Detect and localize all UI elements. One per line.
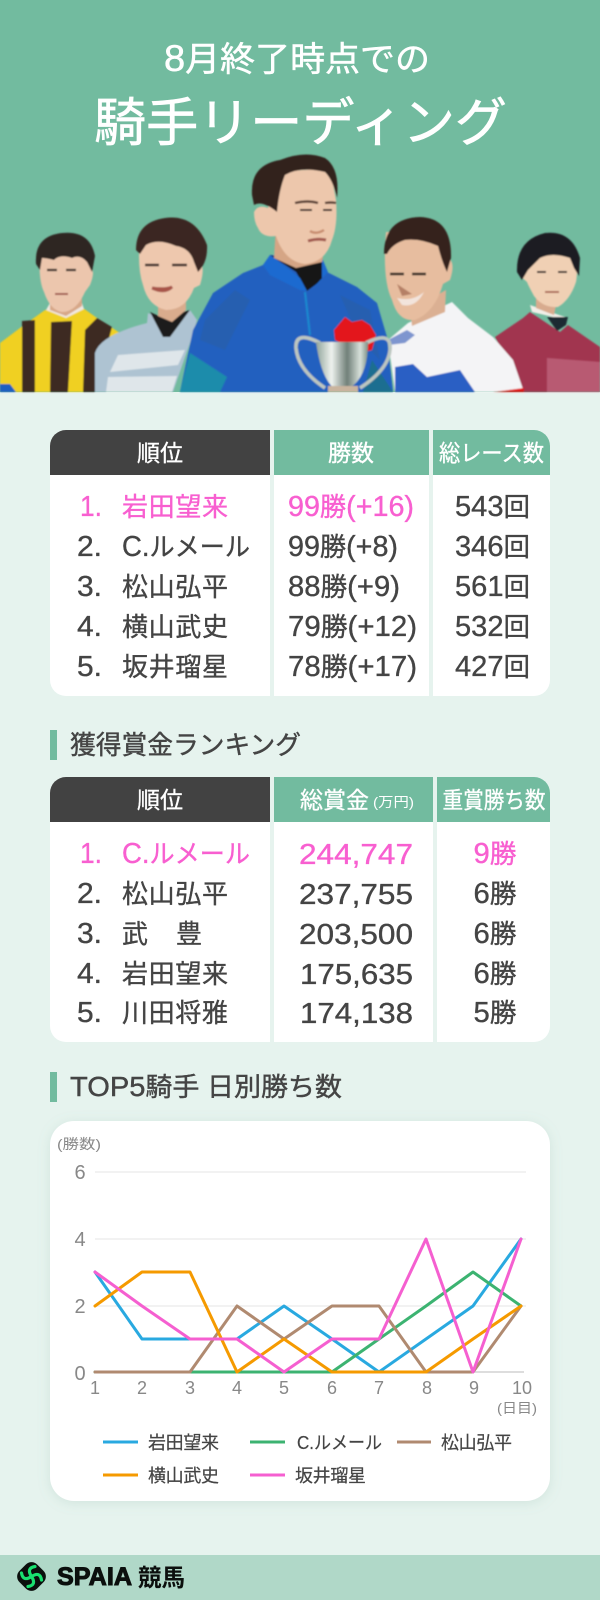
x axis labels: 5 bbox=[279, 1378, 289, 1398]
jockey photos bbox=[0, 154, 600, 392]
row 3: 武 bbox=[122, 919, 148, 949]
row 5: 坂井瑠星 bbox=[122, 652, 228, 682]
y axis title: (勝数) bbox=[57, 1136, 101, 1152]
row 2: 237,755 bbox=[299, 879, 413, 911]
x axis labels: 2 bbox=[137, 1378, 147, 1398]
table 1: jockey ranking bbox=[50, 430, 550, 696]
row 5 bbox=[77, 651, 530, 683]
row 4: 79勝(+12) bbox=[288, 611, 417, 643]
row 1: 岩田望来 bbox=[122, 492, 228, 522]
row 4 bbox=[77, 958, 516, 991]
x axis labels: 9 bbox=[469, 1378, 479, 1398]
row 4: 4. bbox=[77, 958, 102, 990]
legend: 松山弘平 bbox=[441, 1433, 512, 1453]
trophy and red rosette bbox=[296, 317, 390, 392]
header labels: 順位 bbox=[137, 787, 183, 813]
row 5 bbox=[77, 997, 516, 1030]
row 5: 5. bbox=[77, 997, 102, 1029]
row 5: 78勝(+17) bbox=[288, 651, 417, 683]
header labels: 重賞勝ち数 bbox=[442, 787, 546, 813]
row 1 bbox=[80, 838, 516, 871]
row 1: 9勝 bbox=[474, 838, 516, 870]
title line 1: 8月終了時点での bbox=[164, 38, 430, 79]
y axis labels and grid: 2 bbox=[74, 1296, 86, 1318]
x axis labels: 10 bbox=[512, 1378, 532, 1398]
header labels: 総賞金 bbox=[300, 787, 369, 813]
row 4: 6勝 bbox=[474, 958, 516, 990]
x axis labels: 1 bbox=[90, 1378, 100, 1398]
row 5: 5勝 bbox=[474, 997, 516, 1029]
row 2: 99勝(+8) bbox=[288, 531, 398, 563]
row 3 bbox=[77, 571, 530, 603]
row 4: 175,635 bbox=[300, 959, 413, 991]
row 1: 244,747 bbox=[299, 839, 413, 871]
row 1 bbox=[80, 491, 530, 523]
y axis labels and grid: 4 bbox=[74, 1229, 86, 1251]
row 4: 532回 bbox=[455, 611, 530, 643]
y axis labels and grid bbox=[74, 1162, 526, 1385]
row 3: 豊 bbox=[176, 919, 202, 949]
row 2: 6勝 bbox=[474, 878, 516, 910]
row 2 bbox=[77, 878, 516, 911]
x axis labels: 3 bbox=[185, 1378, 195, 1398]
icon: SPAIA logo bbox=[14, 1559, 49, 1594]
row 2 bbox=[77, 531, 530, 563]
row 3: 3. bbox=[77, 571, 102, 603]
row 5: 174,138 bbox=[300, 998, 413, 1030]
x axis labels: (日目) bbox=[497, 1400, 537, 1416]
x axis labels: 7 bbox=[374, 1378, 384, 1398]
heading: prize ranking: 獲得賞金ランキング bbox=[70, 730, 301, 760]
row 3: 88勝(+9) bbox=[288, 571, 400, 603]
header labels bbox=[137, 440, 544, 466]
header labels: 勝数 bbox=[328, 440, 374, 466]
footer bar: 競馬 bbox=[138, 1565, 185, 1592]
jockey 4: white and blue silks bbox=[384, 217, 524, 392]
y axis labels and grid: 0 bbox=[74, 1363, 86, 1385]
row 4: 横山武史 bbox=[122, 612, 228, 642]
row 5: 427回 bbox=[455, 651, 530, 683]
x axis labels: 6 bbox=[327, 1378, 337, 1398]
row 1: 543回 bbox=[455, 491, 530, 523]
row 3: 561回 bbox=[455, 571, 530, 603]
header labels: 順位 bbox=[137, 440, 183, 466]
row 1: 99勝(+16) bbox=[288, 491, 414, 523]
legend: 坂井瑠星 bbox=[295, 1466, 366, 1486]
row 3: 松山弘平 bbox=[122, 572, 228, 602]
row 3: 203,500 bbox=[299, 919, 413, 951]
heading: daily wins: TOP5騎手 日別勝ち数 bbox=[70, 1071, 342, 1102]
row 3: 6勝 bbox=[474, 918, 516, 950]
row 5: 5. bbox=[77, 651, 102, 683]
row 3 bbox=[77, 918, 516, 951]
row 3: 3. bbox=[77, 918, 102, 950]
line chart series bbox=[95, 1239, 521, 1372]
table 2: prize money ranking bbox=[50, 777, 550, 1042]
legend: 横山武史 bbox=[148, 1466, 219, 1486]
header labels: 総レース数 bbox=[439, 440, 544, 466]
row 2: 2. bbox=[77, 531, 102, 563]
y axis labels and grid: 6 bbox=[74, 1162, 86, 1184]
logo wordmark: SPAIA bbox=[57, 1563, 132, 1591]
row 2: 松山弘平 bbox=[122, 879, 228, 909]
row 2: 346回 bbox=[455, 531, 530, 563]
legend: 岩田望来 bbox=[148, 1433, 219, 1453]
x axis labels: 4 bbox=[232, 1378, 242, 1398]
legend bbox=[103, 1433, 512, 1486]
row 4 bbox=[77, 611, 530, 643]
jockey 1: yellow and brown silks bbox=[0, 233, 120, 392]
row 2: 2. bbox=[77, 878, 102, 910]
x axis labels bbox=[90, 1378, 537, 1416]
row 1: 1. bbox=[80, 491, 102, 523]
footer bar bbox=[0, 1555, 600, 1600]
row 1: 1. bbox=[80, 838, 102, 870]
header labels bbox=[137, 787, 546, 813]
x axis labels: 8 bbox=[422, 1378, 432, 1398]
row 4: 岩田望来 bbox=[122, 959, 228, 989]
row 2: C.ルメール bbox=[122, 531, 250, 563]
header panel bbox=[0, 0, 600, 392]
title line 2: 騎手リーディング bbox=[94, 95, 507, 153]
legend: C.ルメール bbox=[297, 1433, 382, 1453]
jockey 5: maroon silks bbox=[495, 233, 600, 392]
header labels: (万円) bbox=[373, 794, 414, 810]
jockey 3: blue silks, leader bbox=[180, 154, 393, 392]
row 1: C.ルメール bbox=[122, 838, 250, 870]
chart panel bbox=[50, 1121, 550, 1501]
row 5: 川田将雅 bbox=[122, 998, 228, 1028]
jockey 2: pale blue silks bbox=[95, 218, 207, 392]
row 4: 4. bbox=[77, 611, 102, 643]
